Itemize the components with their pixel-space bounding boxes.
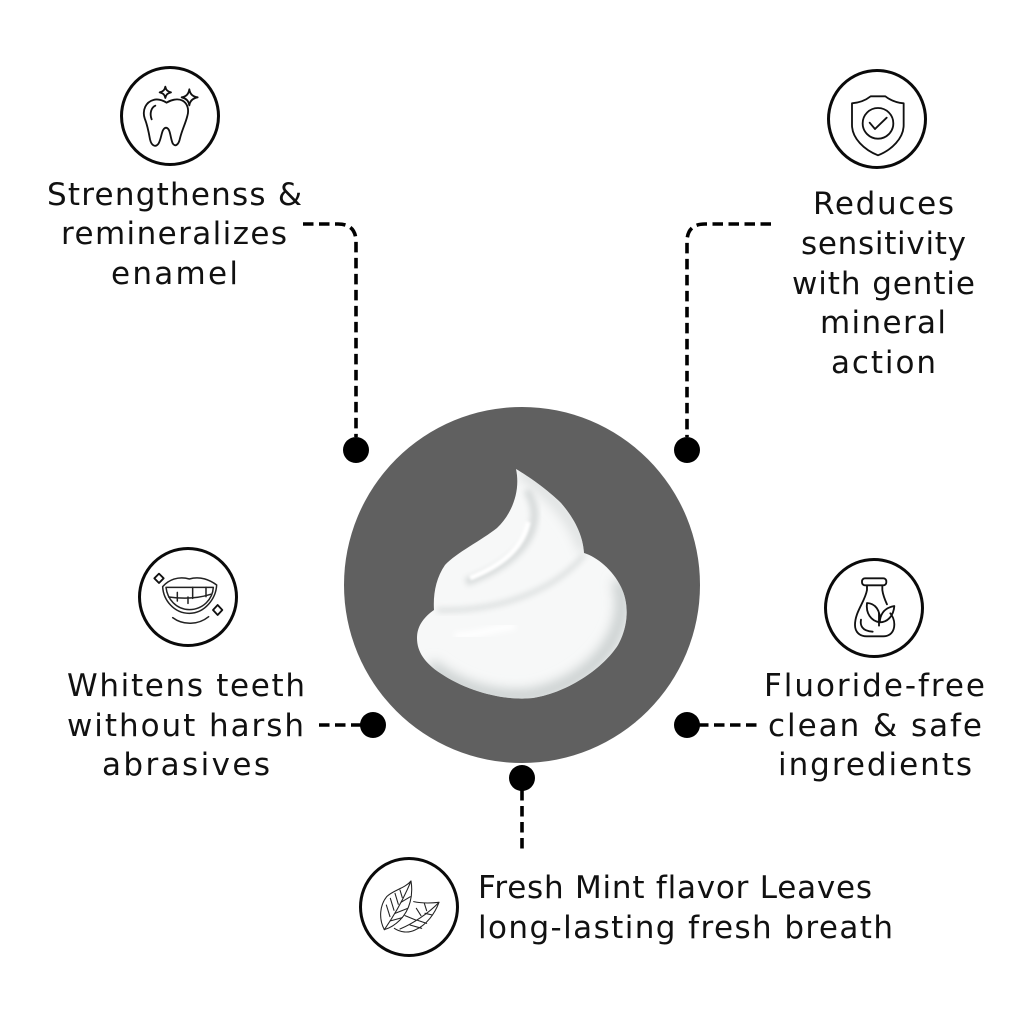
dot: mint bbox=[509, 765, 535, 791]
connector: enamel bbox=[303, 224, 356, 437]
connector: fluoride-free bbox=[698, 723, 757, 727]
text: fluoride-free bbox=[764, 668, 985, 783]
icon: tooth with sparkles bbox=[122, 68, 218, 164]
text: sensitivity bbox=[792, 186, 975, 381]
connector: mint bbox=[520, 790, 524, 850]
central dark circle bbox=[344, 407, 700, 763]
text: sensitivity: Reduces bbox=[813, 186, 954, 222]
dot: whitening bbox=[360, 712, 386, 738]
dot: fluoride-free bbox=[674, 712, 700, 738]
text: enamel: remineralizes bbox=[61, 216, 287, 252]
text: enamel bbox=[47, 177, 302, 292]
dot: enamel bbox=[343, 437, 369, 463]
icon: smiling mouth bbox=[140, 548, 236, 646]
text: mint: Fresh Mint flavor Leaves bbox=[478, 870, 872, 906]
text: fluoride-free: clean & safe bbox=[768, 708, 982, 744]
text: enamel: enamel bbox=[111, 256, 238, 292]
text: mint bbox=[478, 870, 893, 946]
text: fluoride-free: ingredients bbox=[778, 747, 972, 783]
foam swirl bbox=[417, 469, 627, 699]
icon: shield with check bbox=[828, 70, 926, 168]
icon: bottle with leaves bbox=[826, 560, 922, 656]
text: enamel: Strengthenss & bbox=[47, 177, 302, 213]
text: sensitivity: with gentie bbox=[792, 266, 975, 302]
text: whitening: Whitens teeth bbox=[67, 668, 305, 704]
connector: whitening bbox=[319, 723, 362, 727]
text: whitening: abrasives bbox=[102, 747, 270, 783]
text: fluoride-free: Fluoride-free bbox=[764, 668, 985, 704]
dot: sensitivity bbox=[674, 437, 700, 463]
text: sensitivity: sensitivity bbox=[801, 226, 966, 262]
text: sensitivity: mineral bbox=[820, 305, 946, 341]
text: whitening: without harsh bbox=[67, 708, 304, 744]
text: whitening bbox=[67, 668, 305, 783]
icon: mint leaves bbox=[360, 858, 458, 956]
connector: sensitivity bbox=[687, 224, 771, 437]
text: sensitivity: action bbox=[831, 345, 936, 381]
text: mint: long-lasting fresh breath bbox=[478, 910, 893, 946]
